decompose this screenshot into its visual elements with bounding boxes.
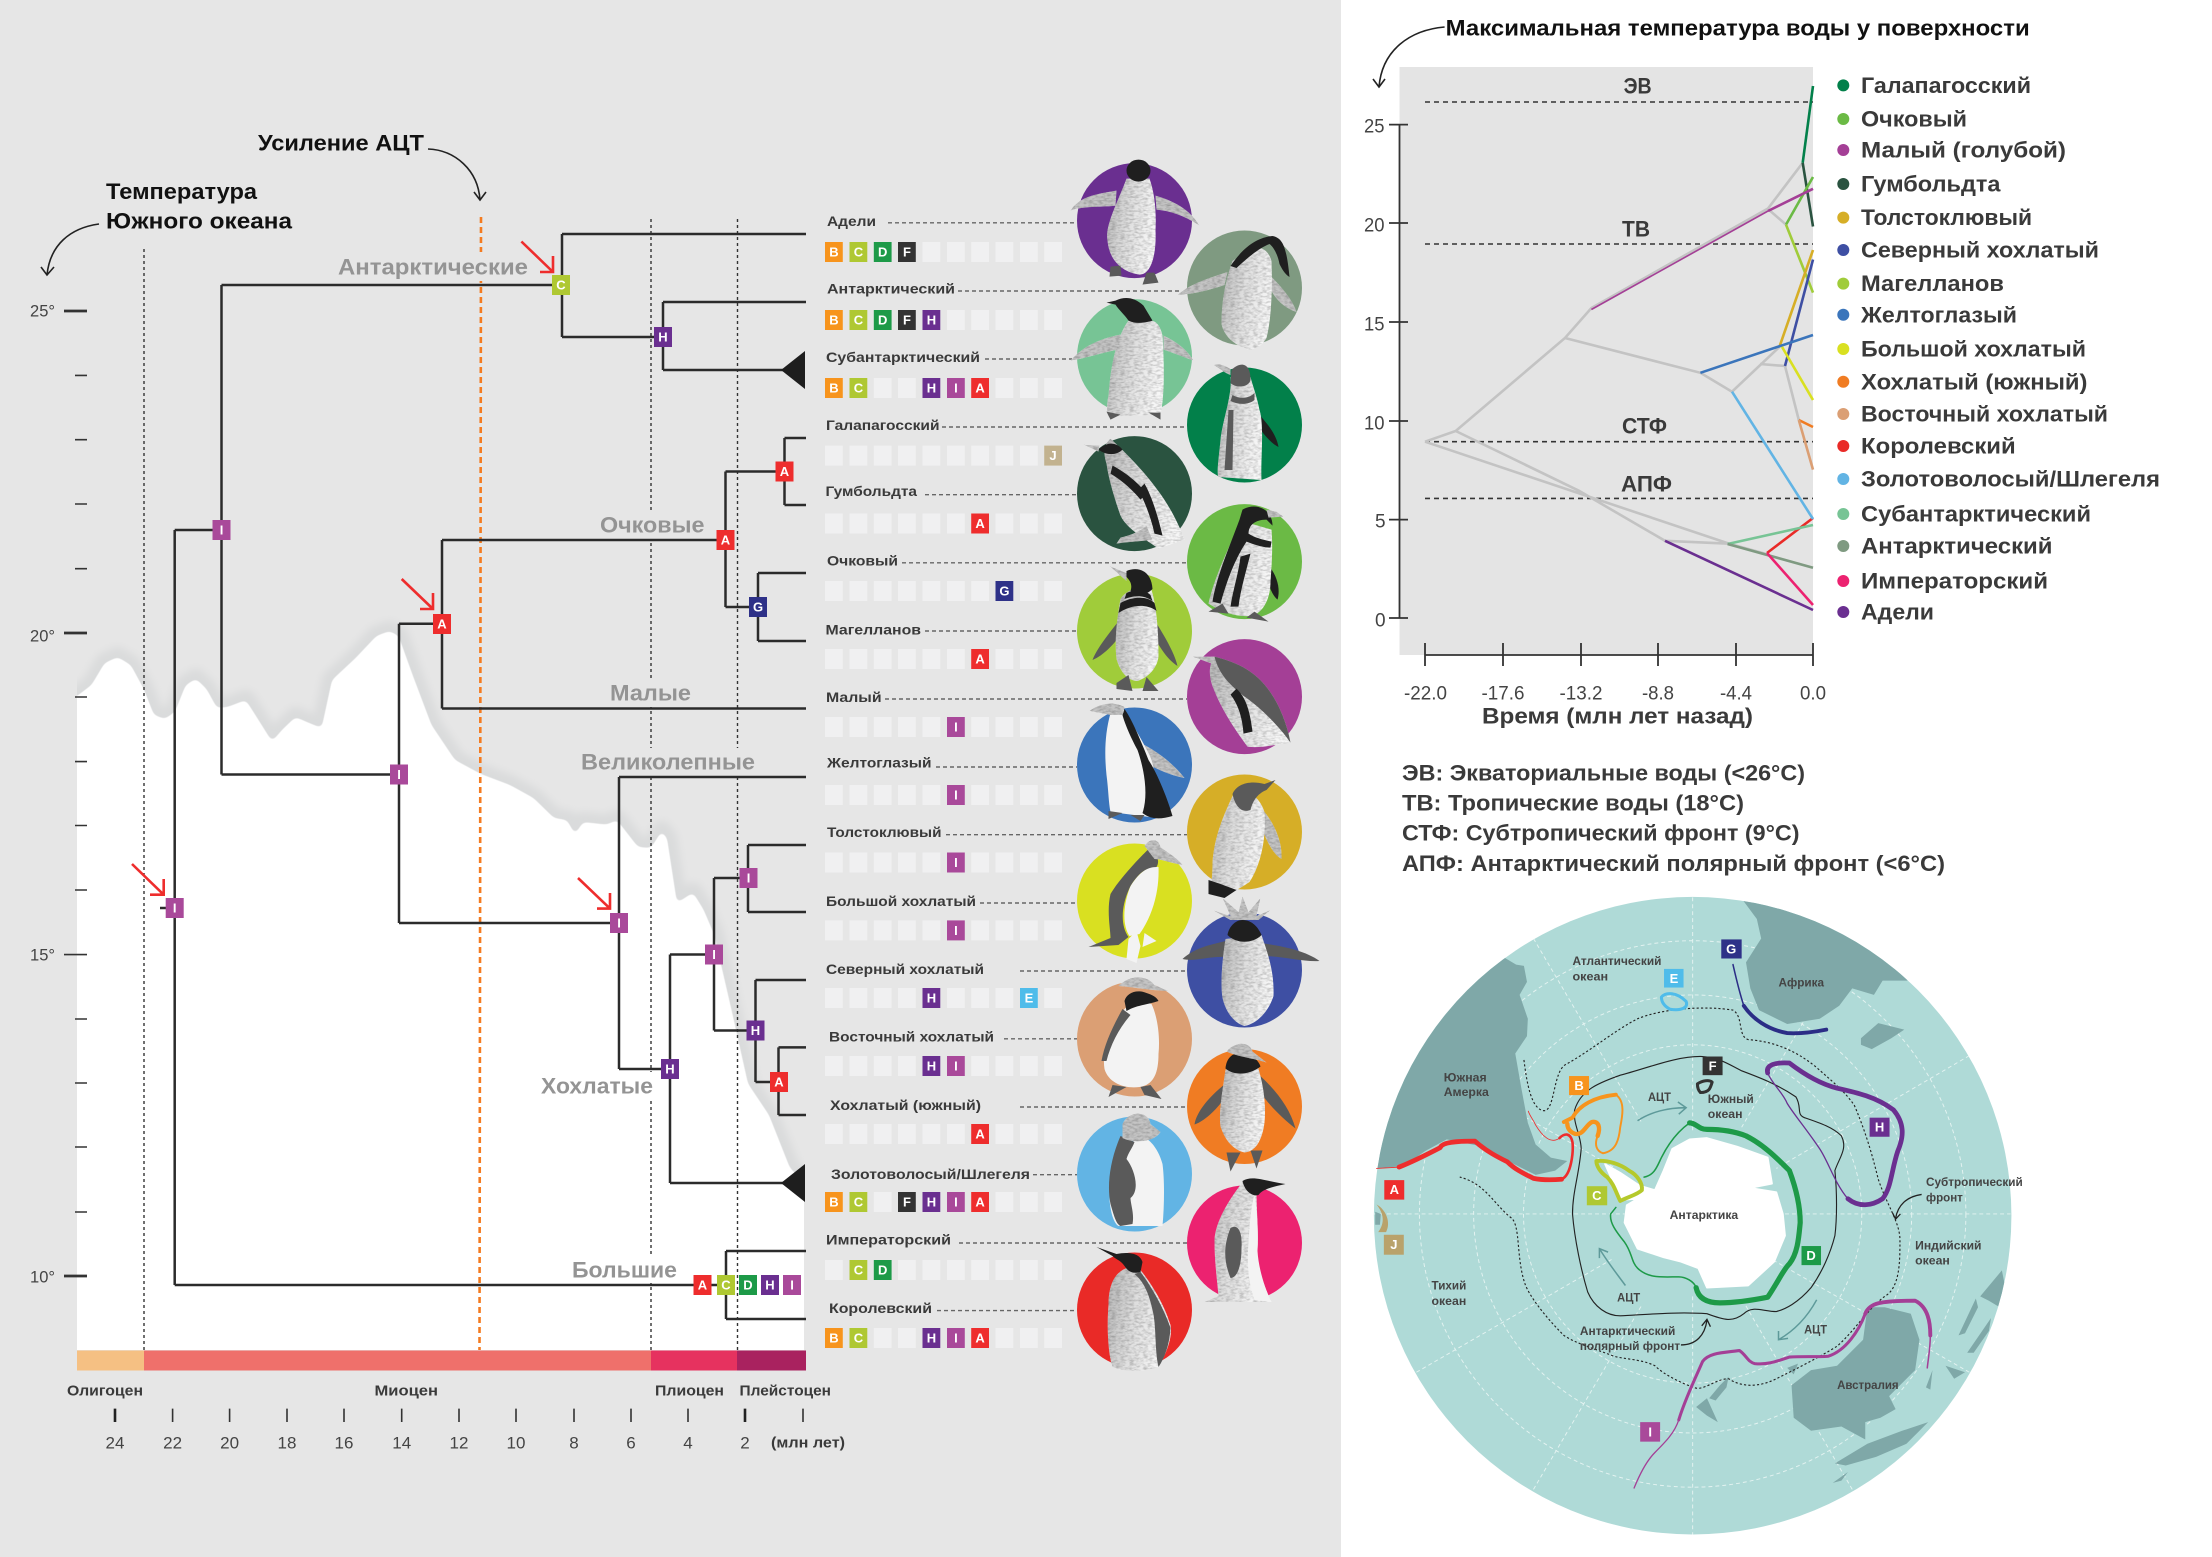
species: Адели: F xyxy=(903,244,911,260)
species: Золотоволосый/Шлегеля: H xyxy=(927,1194,936,1210)
x axis: -17.6 xyxy=(1482,684,1524,704)
region markers: C xyxy=(1592,1188,1602,1203)
map labels: Субтропический xyxy=(1926,1176,2023,1189)
species: Очковый: Очковый xyxy=(827,553,898,569)
tree node markers: I xyxy=(617,916,621,930)
species: Золотоволосый/Шлегеля xyxy=(825,1166,1062,1212)
species: Гумбольдта: A xyxy=(975,516,985,531)
species: Субантарктический: C xyxy=(854,380,864,396)
panel: polar map xyxy=(1360,880,2023,1535)
Antarctic polar front xyxy=(1573,1056,1844,1319)
tree node markers: H xyxy=(765,1278,775,1292)
epoch labels: Олигоцен xyxy=(67,1382,143,1400)
species: Антарктический: C xyxy=(854,312,864,328)
collapsed clade triangles xyxy=(781,351,805,1202)
text block: front definitions: ТВ: Тропические воды (18°C) xyxy=(1402,790,1744,816)
penguin: Адели xyxy=(1070,160,1200,285)
map labels: океан xyxy=(1573,971,1608,984)
route I xyxy=(1634,1301,1930,1488)
text block: front definitions: АПФ: Антарктический полярный фронт (<6°C) xyxy=(1402,851,1945,876)
tree node markers: I xyxy=(712,947,716,962)
species: Галапагосский: J xyxy=(1049,448,1057,463)
chart legend: Желтоглазый xyxy=(1860,302,2017,327)
species: Золотоволосый/Шлегеля: B xyxy=(829,1194,839,1210)
map labels: Тихий xyxy=(1432,1279,1466,1292)
ancestral branches xyxy=(1425,163,1803,555)
x axis: -4.4 xyxy=(1720,684,1752,704)
map labels: АЦТ xyxy=(1648,1091,1672,1104)
title: temperature of Southern Ocean: Южного океана xyxy=(106,208,293,234)
chart legend: Толстоклювый xyxy=(1861,205,2032,230)
penguin: Северный хохлатый xyxy=(1182,896,1320,1028)
species: Толстоклювый: I xyxy=(954,855,958,870)
region markers: B xyxy=(1574,1078,1584,1093)
map labels: океан xyxy=(1708,1108,1743,1121)
species: Магелланов: A xyxy=(975,652,985,666)
x axis xyxy=(1404,643,1826,728)
temperature axis: 25° xyxy=(30,302,55,320)
species: Большой хохлатый: Большой хохлатый xyxy=(826,893,976,909)
time axis: 20 xyxy=(220,1434,239,1452)
y axis: 20 xyxy=(1364,216,1384,236)
text block: front definitions: СТФ: Субтропический фронт (9°C) xyxy=(1402,820,1800,846)
penguin: Очковый xyxy=(1187,504,1302,622)
ACC arrows xyxy=(1599,1102,1817,1340)
species: Субантарктический: H xyxy=(927,380,936,396)
time axis: 24 xyxy=(106,1434,124,1452)
penguin: Золотоволосый xyxy=(1077,1114,1192,1232)
map labels: Австралия xyxy=(1837,1379,1899,1392)
route D xyxy=(1611,1123,1800,1303)
species: Императорский: C xyxy=(854,1262,864,1278)
y axis: 5 xyxy=(1375,512,1386,532)
temperature front lines: АПФ xyxy=(1621,472,1672,496)
species: Северный хохлатый: Северный хохлатый xyxy=(826,961,984,977)
species branches xyxy=(1591,86,1813,610)
species: Галапагосский: Галапагосский xyxy=(826,417,940,433)
species: Субантарктический: A xyxy=(975,380,985,396)
species: Адели: D xyxy=(878,244,887,260)
tree node markers xyxy=(166,275,801,1295)
y axis: 15 xyxy=(1364,314,1384,336)
tree node markers: I xyxy=(397,767,401,782)
temperature axis xyxy=(30,302,87,1286)
species: Адели: C xyxy=(854,244,864,260)
chart legend: Антарктический xyxy=(1861,534,2052,558)
species: Гумбольдта: Гумбольдта xyxy=(826,483,917,499)
map labels: Южный xyxy=(1708,1093,1754,1106)
tree node markers: I xyxy=(747,870,750,886)
species: Королевский: I xyxy=(954,1330,958,1346)
tree node markers: I xyxy=(173,900,177,916)
penguin: Гумбольдта xyxy=(1077,436,1192,551)
tree node markers: I xyxy=(220,522,223,538)
map labels: фронт xyxy=(1926,1191,1963,1204)
phylogenetic tree xyxy=(160,234,806,1319)
species: Антарктический xyxy=(825,281,1062,330)
penguin: Магелланов xyxy=(1077,566,1192,691)
temperature front lines: СТФ xyxy=(1622,414,1667,438)
temperature axis: 15° xyxy=(30,946,55,964)
landmasses xyxy=(1360,880,2011,1483)
penguin: Субантарктический xyxy=(1070,298,1194,420)
species: Малый xyxy=(825,689,1062,737)
tree node markers: H xyxy=(658,330,668,344)
group labels: Большие xyxy=(572,1258,677,1282)
tree node markers: C xyxy=(721,1278,731,1292)
tree node markers: A xyxy=(774,1074,784,1090)
temperature axis: 20° xyxy=(30,626,55,646)
species: Императорский xyxy=(825,1232,1062,1280)
map labels: Южная xyxy=(1444,1071,1487,1084)
species: Субантарктический: B xyxy=(829,380,839,396)
geological time bar xyxy=(77,1350,806,1370)
chart legend: Золотоволосый/Шлегеля xyxy=(1861,466,2160,492)
chart legend: Субантарктический xyxy=(1861,502,2091,526)
species: Малый: Малый xyxy=(826,689,882,705)
tree node markers: G xyxy=(753,600,763,614)
chart legend: Северный хохлатый xyxy=(1861,238,2099,262)
penguin: Толстоклювый xyxy=(1187,774,1302,898)
species: Антарктический: B xyxy=(829,312,839,328)
panel: species labels and regions xyxy=(825,213,1187,1348)
group labels: Малые xyxy=(610,680,691,706)
title: temperature of Southern Ocean: Температура xyxy=(106,179,258,204)
chart legend: Галапагосский xyxy=(1861,73,2031,98)
penguin: Восточный хохлатый xyxy=(1077,977,1192,1099)
chart legend xyxy=(1837,73,2160,624)
tree node markers: A xyxy=(780,464,790,479)
species: Восточный хохлатый xyxy=(825,1029,1062,1076)
time axis: 16 xyxy=(335,1434,353,1452)
species: Толстоклювый xyxy=(825,824,1062,872)
panel: penguin portraits xyxy=(1070,160,1320,1371)
route G xyxy=(1733,965,1826,1033)
species: Очковый xyxy=(825,553,1062,601)
chart legend: Королевский xyxy=(1861,434,2016,458)
map labels: Антарктический xyxy=(1580,1325,1675,1338)
map labels: Антарктика xyxy=(1670,1209,1739,1222)
species: Королевский: B xyxy=(829,1330,839,1346)
region markers: I xyxy=(1648,1425,1652,1440)
map labels: полярный фронт xyxy=(1580,1340,1680,1353)
subtropical front xyxy=(1460,1008,1900,1388)
group labels: Великолепные xyxy=(581,750,755,774)
chart legend: Императорский xyxy=(1861,568,2048,594)
time axis: 6 xyxy=(626,1434,636,1452)
time axis: 22 xyxy=(163,1434,182,1452)
temperature area shadow xyxy=(60,631,830,1200)
y axis: 10 xyxy=(1364,414,1384,434)
x axis: -13.2 xyxy=(1560,684,1602,704)
penguin: Малый xyxy=(1187,639,1302,754)
panel: left background xyxy=(0,0,1341,1557)
species: Золотоволосый/Шлегеля: A xyxy=(975,1194,985,1210)
species: Северный хохлатый: E xyxy=(1025,990,1034,1006)
species: Хохлатый (южный): A xyxy=(975,1126,985,1142)
species: Королевский: Королевский xyxy=(829,1300,932,1316)
species: Адели xyxy=(825,213,1062,262)
map labels: океан xyxy=(1432,1295,1466,1308)
group labels xyxy=(338,254,755,1282)
chart title xyxy=(1373,16,2030,87)
chart legend: Восточный хохлатый xyxy=(1861,402,2108,426)
panel: phylogeny and temperature chart xyxy=(30,130,845,1452)
x axis: Время (млн лет назад) xyxy=(1482,704,1753,728)
y axis: 25 xyxy=(1364,116,1384,138)
tree node markers: H xyxy=(665,1062,675,1076)
species: Королевский xyxy=(825,1300,1062,1348)
tree node markers: A xyxy=(698,1278,708,1292)
species: Восточный хохлатый: Восточный хохлатый xyxy=(829,1029,994,1045)
penguin: Королевский xyxy=(1077,1247,1192,1371)
species: Малый: I xyxy=(954,720,958,734)
pointer arrows xyxy=(1681,1194,1922,1345)
time axis: 2 xyxy=(740,1434,750,1452)
penguin: Большой хохлатый xyxy=(1077,840,1192,963)
penguin: Галапагосский xyxy=(1187,364,1302,482)
chart legend: Малый (голубой) xyxy=(1861,138,2066,162)
tree node markers: C xyxy=(556,278,566,292)
chart legend: Адели xyxy=(1861,600,1934,624)
x axis: 0.0 xyxy=(1800,684,1826,704)
epoch labels: Плейстоцен xyxy=(740,1382,831,1400)
title: ACC strengthening xyxy=(258,130,486,200)
map labels xyxy=(1432,955,2023,1392)
species: Хохлатый (южный): Хохлатый (южный) xyxy=(830,1097,981,1113)
panel: surface temperature chart xyxy=(1364,16,2160,728)
group labels: Хохлатые xyxy=(541,1074,653,1098)
region markers: A xyxy=(1390,1182,1400,1197)
tree node markers: I xyxy=(790,1278,794,1292)
ocean disc xyxy=(1374,897,2011,1534)
chart legend: Большой хохлатый xyxy=(1861,336,2086,362)
species: Золотоволосый/Шлегеля: C xyxy=(854,1194,864,1210)
species: Большой хохлатый xyxy=(825,893,1062,940)
temperature front lines xyxy=(1425,74,1813,498)
region markers: H xyxy=(1875,1120,1884,1135)
time axis: 14 xyxy=(392,1434,411,1452)
species: Императорский: D xyxy=(878,1262,887,1278)
species: Толстоклювый: Толстоклювый xyxy=(827,824,942,840)
region markers: E xyxy=(1670,971,1679,986)
species: Золотоволосый/Шлегеля: F xyxy=(903,1194,911,1210)
chart legend: Хохлатый (южный) xyxy=(1861,369,2088,394)
route C xyxy=(1596,1161,1642,1201)
epoch labels xyxy=(67,1382,831,1400)
route E xyxy=(1661,994,1687,1010)
time axis: (млн лет) xyxy=(771,1434,845,1452)
time axis: 10 xyxy=(507,1434,525,1452)
species: Золотоволосый/Шлегеля: I xyxy=(954,1194,958,1210)
epoch labels: Плиоцен xyxy=(655,1382,724,1400)
species: Магелланов: Магелланов xyxy=(826,622,921,638)
tree node markers: A xyxy=(437,616,447,632)
route H xyxy=(1767,1063,1902,1205)
temperature front lines: ТВ xyxy=(1622,216,1650,242)
region markers: F xyxy=(1709,1059,1717,1074)
Antarctica xyxy=(1605,1138,1785,1288)
temperature axis: 10° xyxy=(30,1268,55,1286)
map labels: АЦТ xyxy=(1617,1292,1641,1305)
species: Желтоглазый: Желтоглазый xyxy=(826,755,932,771)
map labels: Амерка xyxy=(1444,1086,1489,1099)
species: Королевский: A xyxy=(975,1330,985,1346)
species: Императорский: Императорский xyxy=(826,1232,951,1248)
chart legend: Магелланов xyxy=(1861,271,2004,296)
tree node markers: D xyxy=(743,1278,753,1292)
x axis: -22.0 xyxy=(1404,684,1447,704)
leader lines xyxy=(885,223,1187,1311)
map labels: АЦТ xyxy=(1804,1324,1828,1337)
species: Галапагосский xyxy=(825,417,1062,466)
chart legend: Очковый xyxy=(1861,106,1967,132)
species: Магелланов xyxy=(825,622,1062,669)
region markers: D xyxy=(1806,1248,1816,1263)
region markers: J xyxy=(1390,1237,1397,1252)
species: Королевский: C xyxy=(854,1330,864,1346)
epoch labels: Миоцен xyxy=(374,1382,438,1400)
time axis: 18 xyxy=(278,1434,296,1452)
time axis: 8 xyxy=(569,1434,579,1452)
epoch boundary lines xyxy=(144,217,757,1350)
species: Большой хохлатый: I xyxy=(954,923,958,938)
text block: front definitions: ЭВ: Экваториальные воды (<26°C) xyxy=(1402,760,1805,786)
y axis xyxy=(1364,116,1408,632)
chart legend: Гумбольдта xyxy=(1861,172,2001,196)
group labels: Очковые xyxy=(600,512,704,538)
red arrows xyxy=(132,242,610,909)
temperature white area xyxy=(77,632,804,1350)
penguin: Хохлатый (южный) xyxy=(1187,1044,1302,1172)
graticule xyxy=(1373,897,2011,1535)
map labels: Атлантический xyxy=(1573,955,1661,968)
time axis xyxy=(106,1409,845,1452)
species: Адели: B xyxy=(829,244,839,260)
route J xyxy=(1376,1204,1388,1232)
species: Северный хохлатый: H xyxy=(927,990,936,1006)
species: Антарктический: D xyxy=(878,312,887,328)
penguin: Антарктический xyxy=(1178,230,1302,350)
region markers xyxy=(1384,939,1890,1442)
map labels: Африка xyxy=(1779,977,1825,990)
chart plot background xyxy=(1400,67,1813,655)
species: Желтоглазый: I xyxy=(954,788,958,802)
species: Королевский: H xyxy=(927,1330,936,1346)
route B xyxy=(1564,1095,1622,1153)
species: Восточный хохлатый: H xyxy=(927,1058,936,1074)
species: Северный хохлатый xyxy=(825,961,1062,1008)
species: Антарктический: H xyxy=(927,312,936,328)
penguin: Желтоглазый xyxy=(1077,704,1192,822)
text block: front definitions xyxy=(1402,760,1945,876)
species: Субантарктический: I xyxy=(954,380,958,396)
species: Золотоволосый/Шлегеля: Золотоволосый/Шлегеля xyxy=(831,1166,1030,1182)
penguin: Императорский xyxy=(1187,1178,1302,1302)
route A xyxy=(1376,1111,1573,1180)
species: Восточный хохлатый: I xyxy=(954,1058,958,1074)
species: Хохлатый (южный) xyxy=(825,1097,1062,1144)
time axis: 12 xyxy=(450,1434,468,1452)
species: Очковый: G xyxy=(999,584,1009,598)
chart title: Максимальная температура воды у поверхности xyxy=(1446,16,2030,40)
species: Желтоглазый xyxy=(825,755,1062,805)
title: ACC strengthening: Усиление АЦТ xyxy=(258,130,425,156)
time axis: 4 xyxy=(683,1434,693,1452)
species: Субантарктический xyxy=(825,349,1062,398)
map labels: Индийский xyxy=(1915,1240,1981,1253)
tree node markers: H xyxy=(751,1023,760,1038)
map labels: океан xyxy=(1915,1255,1950,1268)
species: Антарктический: F xyxy=(903,312,911,328)
x axis: -8.8 xyxy=(1642,684,1674,704)
y axis: 0 xyxy=(1375,610,1386,632)
route F xyxy=(1697,1081,1712,1093)
species: Субантарктический: Субантарктический xyxy=(826,349,980,365)
temperature front lines: ЭВ xyxy=(1624,74,1652,98)
group labels: Антарктические xyxy=(338,254,528,280)
title: temperature of Southern Ocean xyxy=(41,179,293,275)
species: Антарктический: Антарктический xyxy=(827,281,955,297)
region markers: G xyxy=(1726,941,1736,956)
tree node markers: A xyxy=(721,532,731,548)
species: Гумбольдта xyxy=(825,483,1062,534)
species: Адели: Адели xyxy=(827,213,876,229)
